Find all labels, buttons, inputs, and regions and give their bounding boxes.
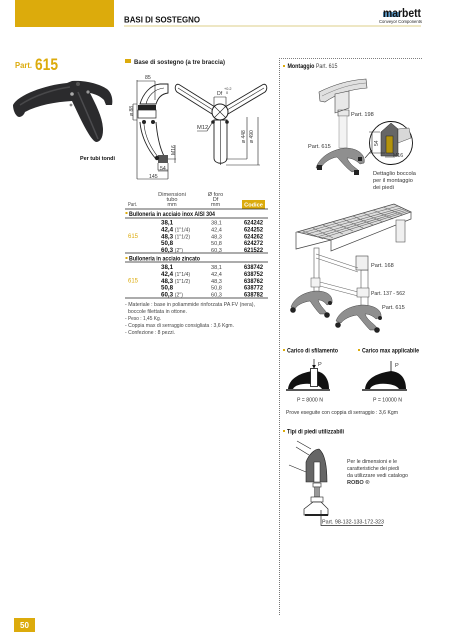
heading: montaggio: Montaggio Part. 615 <box>288 64 338 70</box>
table section: stainless steel bolts: 42,4 <box>211 228 222 234</box>
page number: 50 <box>20 621 29 630</box>
table section: stainless steel bolts: 50,8 <box>161 240 174 247</box>
table section: stainless steel bolts: 624242 <box>244 220 264 226</box>
table section: stainless steel bolts: 624272 <box>244 240 264 247</box>
table header: Dimensioni <box>158 192 186 198</box>
technical drawing: top view <box>175 84 267 165</box>
table section: zinc-plated bolts <box>126 256 264 298</box>
table section: zinc-plated bolts: 48,3 <box>211 279 222 285</box>
diagram: max load: P <box>395 363 399 369</box>
table header <box>128 192 265 209</box>
table section: zinc-plated bolts: 60,3 (2") <box>161 292 183 298</box>
illustration: mounting assembly: Part. 198 <box>351 112 374 118</box>
table section: stainless steel bolts: 615 <box>128 234 139 240</box>
heading: tipi di piedi: Tipi di piedi utilizzabili <box>287 430 344 436</box>
table section: zinc-plated bolts: 615 <box>128 278 139 284</box>
table section: zinc-plated bolts: 42,4 (1"1/4) <box>161 271 190 278</box>
foot catalogue note: caratteristiche dei piedi <box>347 466 399 472</box>
technical drawing: top view: 0 <box>226 91 228 95</box>
table header: Codice <box>244 202 263 208</box>
illustration: mounting assembly: M16 <box>393 153 403 159</box>
technical drawing: side view: M16 <box>171 145 177 155</box>
illustration: foot section: Part. 98-132-133-172-323 <box>322 520 384 526</box>
table section: stainless steel bolts: 48,3 <box>211 234 222 240</box>
illustration: mounting assembly: per il montaggio <box>373 178 413 184</box>
table header: Part. <box>128 202 137 208</box>
foot catalogue note: ROBO ® <box>347 479 370 486</box>
table rules <box>125 209 268 298</box>
table section: zinc-plated bolts: 38,1 <box>161 264 174 271</box>
illustration: mounting assembly: dei piedi <box>373 185 394 191</box>
product notes <box>125 302 255 336</box>
technical drawing: top view: M12 <box>197 125 208 131</box>
illustration: mounting assembly: Part. 615 <box>308 144 331 150</box>
table section: zinc-plated bolts: 42,4 <box>211 272 222 278</box>
photo: three-armed black base <box>13 81 112 142</box>
table header: tubo <box>167 197 177 203</box>
table section: zinc-plated bolts: 60,3 <box>211 292 222 298</box>
technical drawing: top view: ø 448 <box>241 130 247 143</box>
table section: stainless steel bolts <box>126 212 264 254</box>
part number heading: 615 <box>35 56 58 74</box>
heading: carico max applicabile: Carico max applicabile <box>362 348 420 354</box>
technical drawing: side view: 54 <box>160 166 166 172</box>
table section: zinc-plated bolts: 638772 <box>244 284 264 292</box>
technical drawing: side view: ø 88 <box>129 106 135 116</box>
table header: mm <box>167 202 177 208</box>
table section: stainless steel bolts: 50,8 <box>211 241 222 247</box>
table section: zinc-plated bolts: 50,8 <box>211 286 222 292</box>
technical drawing: side view: 85 <box>145 75 151 81</box>
table section: stainless steel bolts: Bulloneria in acciaio inox AISI 304 <box>129 212 216 218</box>
table section: zinc-plated bolts: 638762 <box>244 278 264 285</box>
table header: Df <box>213 197 219 203</box>
test note: Prove eseguite con coppia di serraggio : 3,6 Kgm <box>286 410 398 416</box>
foot catalogue note: Per le dimensioni e le <box>347 459 397 465</box>
diagram: pull-out load <box>286 359 330 404</box>
table section: zinc-plated bolts: 638742 <box>244 264 264 271</box>
product notes: - Materiale : base in poliammide rinforzata PA FV (nera), <box>125 302 255 308</box>
table section: stainless steel bolts: 624252 <box>244 226 264 234</box>
page title: BASI DI SOSTEGNO <box>124 15 200 25</box>
table section: stainless steel bolts: 60,3 <box>211 248 222 254</box>
illustration: mounting assembly: Dettaglio boccola <box>373 171 417 177</box>
technical drawing: side view <box>129 75 177 180</box>
table section: stainless steel bolts: 48,3 (1"1/2) <box>161 234 190 240</box>
table section: stainless steel bolts: 38,1 <box>211 220 222 226</box>
part number heading: Part. <box>15 61 32 70</box>
table section: zinc-plated bolts: Bulloneria in acciaio zincato <box>129 256 200 262</box>
table section: stainless steel bolts: 38,1 <box>161 220 174 226</box>
table section: stainless steel bolts: 621522 <box>244 247 264 254</box>
table section: zinc-plated bolts: 638782 <box>244 292 264 298</box>
logo: marbett Conveyor Components: marbett <box>383 6 421 20</box>
foot catalogue note <box>347 459 408 486</box>
header gold block <box>15 0 114 27</box>
table section: zinc-plated bolts: 638752 <box>244 271 264 278</box>
table header: Ø foro <box>208 192 223 198</box>
technical drawing: side view: 145 <box>149 174 158 180</box>
table section: stainless steel bolts: 624262 <box>244 234 264 240</box>
table section: zinc-plated bolts: 38,1 <box>211 265 222 271</box>
table section: stainless steel bolts: 60,3 (2") <box>161 247 183 254</box>
table header: mm <box>211 202 220 208</box>
diagram: pull-out load: P = 8000 N <box>297 398 323 404</box>
photo caption: Per tubi tondi <box>80 156 115 162</box>
illustration: conveyor table: Part. 137 - 562 <box>371 291 405 297</box>
heading: carico di sfilamento: Carico di sfilamento <box>287 348 338 354</box>
dotted panel border <box>280 58 422 615</box>
diagram: max load: P = 10000 N <box>373 398 402 404</box>
product notes: - Coppia max di serraggio consigliata : 3,6 Kgm. <box>125 323 234 329</box>
logo: marbett Conveyor Components <box>379 6 422 24</box>
diagram: max load <box>362 361 407 404</box>
illustration: mounting assembly: 54 <box>374 140 380 146</box>
illustration: foot section <box>289 441 384 526</box>
section heading: base di sostegno: Base di sostegno (a tre braccia) <box>134 59 225 66</box>
diagram: pull-out load: P <box>318 362 322 368</box>
part number heading <box>15 56 58 74</box>
logo: marbett Conveyor Components: Conveyor Components <box>379 19 422 24</box>
technical drawing: top view: ø 490 <box>249 130 255 143</box>
table section: zinc-plated bolts: 50,8 <box>161 284 174 292</box>
illustration: conveyor table: Part. 168 <box>371 263 394 269</box>
product notes: boccole filettata in ottone. <box>128 309 187 315</box>
foot catalogue note: da utilizzare vedi catalogo <box>347 473 408 479</box>
table section: zinc-plated bolts: 48,3 (1"1/2) <box>161 278 190 285</box>
header rule <box>124 26 421 27</box>
technical drawing: top view: Df <box>217 91 223 97</box>
product notes: - Peso : 1,45 Kg. <box>125 316 161 322</box>
technical drawing: top view: +0.2 <box>224 87 232 91</box>
illustration: conveyor table: Part. 615 <box>382 305 405 311</box>
illustration: conveyor table <box>290 204 411 333</box>
illustration: mounting assembly <box>308 79 417 191</box>
table section: stainless steel bolts: 42,4 (1"1/4) <box>161 226 190 234</box>
product notes: - Confezione : 8 pezzi. <box>125 330 175 336</box>
page number <box>14 618 35 632</box>
